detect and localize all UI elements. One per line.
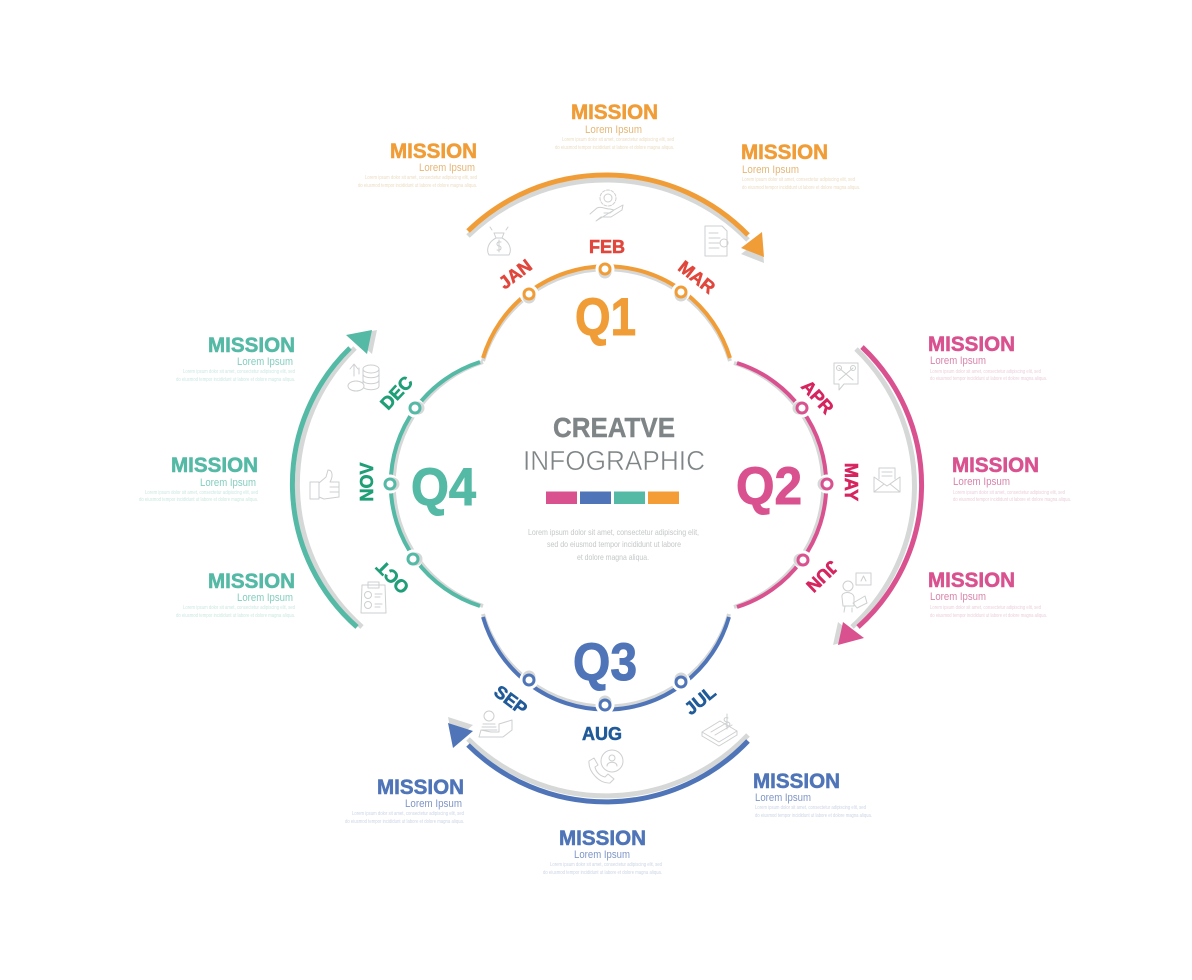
panel: Q3 [345, 614, 872, 876]
description text [528, 527, 699, 562]
text block: mission Q2 top: MISSION [928, 333, 1015, 356]
text block: mission Q4 bottom [176, 570, 295, 619]
month labels Q2: APR [797, 376, 838, 418]
text block: mission Q2 middle: MISSION [952, 454, 1039, 477]
text block: mission Q2 middle: do eiusmod tempor incididunt ut labore et dolore magna aliqua. [953, 497, 1071, 503]
text block: mission Q2 top: do eiusmod tempor incididunt ut labore et dolore magna aliqua. [930, 376, 1047, 382]
description text: sed do eiusmod tempor incididunt ut labore [547, 539, 681, 549]
panel: Q1 [358, 101, 860, 361]
colour legend bars [546, 492, 679, 504]
icon: tools speech bubble [834, 363, 858, 390]
icon: coin stack with arrow [348, 364, 379, 391]
text block: mission Q4 bottom: MISSION [208, 570, 295, 593]
text block: mission Q1 right [741, 141, 860, 191]
icon: person with laptop [842, 573, 871, 612]
outer arrow Q3 [448, 717, 748, 802]
text block: mission Q4 top: do eiusmod tempor incididunt ut labore et dolore magna aliqua. [176, 377, 295, 383]
text block: mission Q3 right: MISSION [753, 770, 840, 793]
text block: mission Q1 centre: do eiusmod tempor incididunt ut labore et dolore magna aliqua. [555, 145, 674, 151]
text block: mission Q2 middle [952, 454, 1071, 503]
title: creatve: CREATVE [553, 412, 675, 443]
month labels Q1: JAN [495, 255, 536, 293]
text block: mission Q2 middle: Lorem Ipsum [953, 476, 1010, 488]
text block: mission Q1 left: Lorem ipsum dolor sit amet, consectetur adipiscing elit, sed [365, 175, 477, 181]
icon: money bag [488, 227, 510, 255]
month labels Q3: JUL [681, 682, 720, 719]
text block: mission Q2 top [928, 333, 1047, 382]
outer arrow Q4 [292, 330, 377, 627]
month labels Q3 [490, 681, 720, 744]
text block: mission Q2 bottom: do eiusmod tempor incididunt ut labore et dolore magna aliqua. [930, 613, 1047, 619]
text block: mission Q4 middle: MISSION [171, 454, 258, 477]
text block: mission Q3 centre: Lorem ipsum dolor sit amet, consectetur adipiscing elit, sed [550, 862, 662, 868]
icon: document [705, 226, 728, 256]
month labels Q4 [357, 372, 417, 598]
month nodes Q4 [382, 400, 424, 567]
month labels Q1: MAR [674, 257, 719, 298]
text block: mission Q2 middle: Lorem ipsum dolor sit amet, consectetur adipiscing elit, sed [953, 490, 1065, 496]
text block: mission Q3 left [345, 776, 464, 825]
icon: telephone [589, 750, 623, 783]
text block: mission Q2 top: Lorem ipsum dolor sit amet, consectetur adipiscing elit, sed [930, 369, 1041, 375]
text block: mission Q4 top: Lorem Ipsum [237, 356, 293, 368]
icon: envelope [874, 468, 900, 492]
outer arrow Q1 [468, 175, 764, 263]
text block: mission Q1 left [358, 140, 477, 189]
text block: mission Q4 middle: do eiusmod tempor incididunt ut labore et dolore magna aliqua. [139, 497, 258, 503]
text block: mission Q3 left: MISSION [377, 776, 464, 799]
text block: mission Q3 centre [543, 827, 662, 876]
text block: mission Q3 right [753, 770, 872, 819]
text block: mission Q1 left: do eiusmod tempor incididunt ut labore et dolore magna aliqua. [358, 183, 477, 189]
icon: gear in hand [590, 190, 623, 221]
month labels Q4: OCT [372, 557, 413, 598]
heading Q3: Q3 [573, 633, 637, 692]
text block: mission Q3 left: Lorem ipsum dolor sit amet, consectetur adipiscing elit, sed [352, 811, 464, 817]
text block: mission Q2 bottom: MISSION [928, 569, 1015, 592]
text block: mission Q1 right: do eiusmod tempor incididunt ut labore et dolore magna aliqua. [742, 185, 860, 191]
text block: mission Q3 centre: Lorem Ipsum [574, 849, 630, 861]
text block: mission Q4 middle: Lorem ipsum dolor sit amet, consectetur adipiscing elit, sed [145, 490, 258, 496]
month labels Q2 [797, 376, 861, 596]
text block: mission Q4 top [176, 334, 295, 383]
month labels Q1: FEB [589, 237, 625, 257]
outer arrow Q2 [833, 347, 922, 645]
text block: mission Q1 centre: Lorem Ipsum [585, 124, 642, 136]
description text: et dolore magna aliqua. [577, 552, 649, 562]
heading Q1: Q1 [575, 288, 636, 347]
month nodes Q1 [521, 261, 689, 304]
panel: Q4 [139, 330, 483, 627]
text block: mission Q4 top: Lorem ipsum dolor sit amet, consectetur adipiscing elit, sed [183, 369, 295, 375]
text block: mission Q3 right: Lorem Ipsum [755, 792, 811, 804]
text block: mission Q2 bottom: Lorem Ipsum [930, 591, 986, 603]
month labels Q3: SEP [490, 681, 531, 719]
text block: mission Q4 bottom: do eiusmod tempor incididunt ut labore et dolore magna aliqua. [176, 613, 295, 619]
month labels Q3: AUG [582, 724, 622, 744]
icon: banknotes [702, 714, 737, 746]
text block: mission Q1 centre: Lorem ipsum dolor sit amet, consectetur adipiscing elit, sed [562, 137, 674, 143]
panel: Q2 [734, 333, 1071, 645]
text block: mission Q2 bottom: Lorem ipsum dolor sit amet, consectetur adipiscing elit, sed [930, 605, 1041, 611]
text block: mission Q1 right: Lorem Ipsum [742, 164, 799, 176]
month labels Q2: MAY [841, 463, 861, 501]
text block: mission Q4 bottom: Lorem Ipsum [237, 592, 293, 604]
heading Q4: Q4 [411, 458, 476, 517]
title: infographic: INFOGRAPHIC [523, 445, 705, 476]
heading Q2: Q2 [736, 457, 802, 516]
inner arc Q4 [391, 362, 483, 606]
text block: mission Q3 centre: MISSION [559, 827, 646, 850]
text block: mission Q1 right: Lorem ipsum dolor sit amet, consectetur adipiscing elit, sed [742, 177, 855, 183]
month labels Q1 [495, 237, 719, 298]
inner arc Q2 [734, 363, 826, 607]
month nodes Q3 [521, 670, 689, 713]
text block: mission Q2 bottom [928, 569, 1047, 619]
inner arc Q3 [483, 614, 729, 710]
text block: mission Q4 bottom: Lorem ipsum dolor sit amet, consectetur adipiscing elit, sed [183, 605, 295, 611]
text block: mission Q1 right: MISSION [741, 141, 828, 164]
text block: mission Q2 top: Lorem Ipsum [930, 355, 986, 367]
text block: mission Q4 middle: Lorem Ipsum [200, 477, 256, 489]
text block: mission Q3 right: Lorem ipsum dolor sit amet, consectetur adipiscing elit, sed [755, 805, 866, 811]
text block: mission Q1 left: MISSION [390, 140, 477, 163]
inner arc Q1 [483, 266, 730, 361]
text block: mission Q3 right: do eiusmod tempor incididunt ut labore et dolore magna aliqua. [755, 813, 872, 819]
text block: mission Q3 left: Lorem Ipsum [405, 798, 462, 810]
month labels Q4: NOV [357, 462, 377, 502]
icon: hand with coins [479, 711, 512, 737]
text block: mission Q1 centre: MISSION [571, 101, 658, 124]
month nodes Q2 [792, 400, 835, 568]
month labels Q4: DEC [376, 372, 417, 414]
text block: mission Q4 top: MISSION [208, 334, 295, 357]
month labels Q2: JUN [802, 557, 842, 596]
icon: checklist clipboard [361, 582, 386, 613]
text block: mission Q1 centre [555, 101, 674, 151]
text block: mission Q4 middle [139, 454, 258, 503]
text block: mission Q3 centre: do eiusmod tempor incididunt ut labore et dolore magna aliqua. [543, 870, 662, 876]
text block: mission Q1 left: Lorem Ipsum [419, 162, 475, 174]
text block: mission Q3 left: do eiusmod tempor incididunt ut labore et dolore magna aliqua. [345, 819, 464, 825]
panel: centre title [523, 412, 705, 562]
icon: thumbs up [310, 470, 339, 499]
description text: Lorem ipsum dolor sit amet, consectetur adipiscing elit, [528, 527, 699, 537]
